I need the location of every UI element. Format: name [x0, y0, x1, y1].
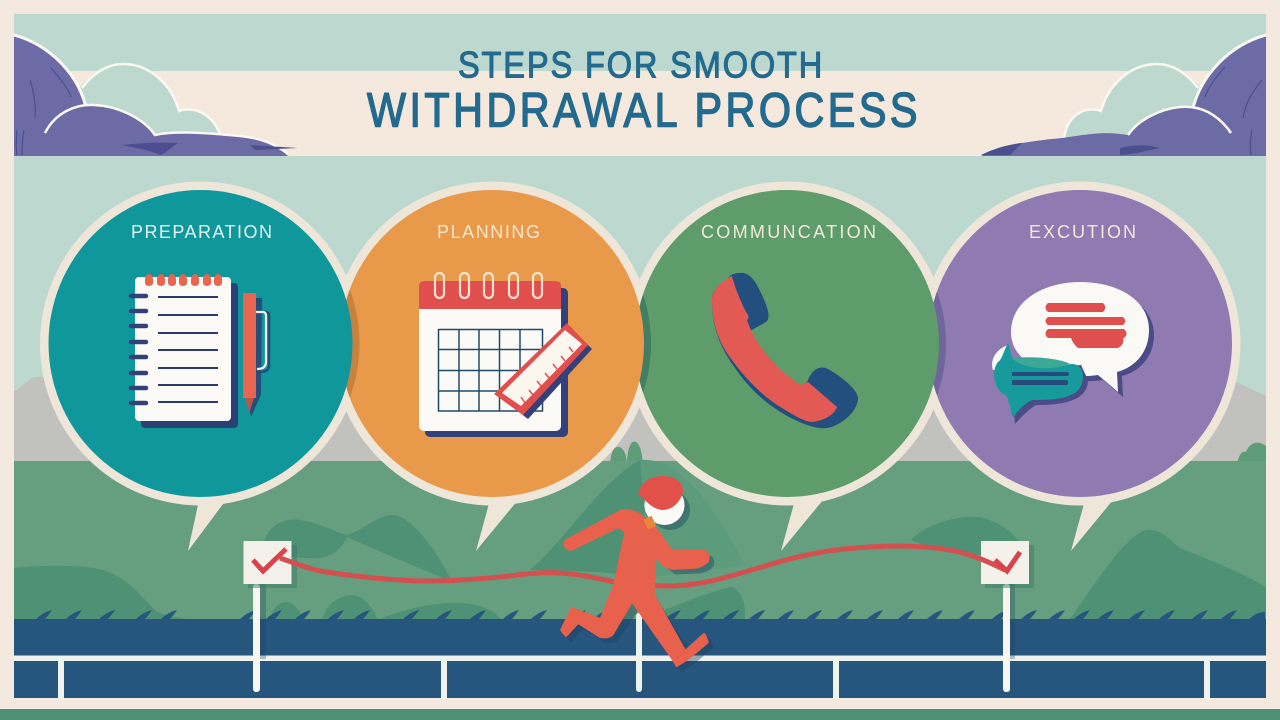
- left cloud cluster: [14, 35, 298, 156]
- label: communication: COMMUNCATION: [701, 222, 876, 242]
- right purple dome: [1192, 35, 1266, 156]
- runner head: [644, 485, 684, 525]
- grey mountains: [14, 376, 1266, 465]
- bottom green strip: [0, 709, 1280, 720]
- label: preparation: PREPARATION: [131, 222, 272, 242]
- right front mound: [981, 108, 1194, 156]
- title line 2: WITHDRAWAL PROCESS: [367, 84, 917, 137]
- runner neck: [643, 516, 656, 530]
- central hill light side: [640, 460, 745, 578]
- right mint cloud: [1065, 71, 1200, 138]
- finish ribbon: [280, 546, 1005, 586]
- icon: calendar with ruler: [419, 273, 592, 437]
- lane lines: [14, 613, 1266, 699]
- green ground: [14, 461, 1266, 621]
- runner: [562, 476, 713, 670]
- title line 1: STEPS FOR SMOOTH: [458, 45, 822, 86]
- panel: communication: [635, 190, 946, 497]
- icon: phone handset: [712, 273, 858, 428]
- left purple dome: [14, 35, 87, 156]
- dark green hills: [14, 460, 1266, 620]
- left front mound: [84, 106, 288, 156]
- right cloud cluster: [981, 35, 1266, 156]
- grass spikes: [35, 610, 1265, 620]
- speech bubble rings and tails: [40, 182, 1240, 551]
- left finish post: [244, 541, 297, 692]
- icon: notebook and pen: [131, 274, 269, 428]
- label: planning: PLANNING: [437, 222, 540, 242]
- runner cap: [638, 476, 683, 510]
- track: [14, 610, 1266, 699]
- title: [367, 45, 917, 137]
- runner body: [562, 511, 708, 665]
- right finish post: [981, 541, 1034, 692]
- left mint cloud: [80, 71, 218, 134]
- label: execution: EXCUTION: [1029, 222, 1136, 242]
- right check mark: [995, 552, 1020, 571]
- cream title band: [14, 71, 1266, 156]
- runner shadow: [567, 490, 713, 670]
- panel: planning: [340, 190, 651, 497]
- small distant hills: [610, 442, 1266, 461]
- panel: preparation: [48, 190, 360, 497]
- icon: chat bubbles: [992, 282, 1154, 424]
- panel: execution: [928, 190, 1232, 497]
